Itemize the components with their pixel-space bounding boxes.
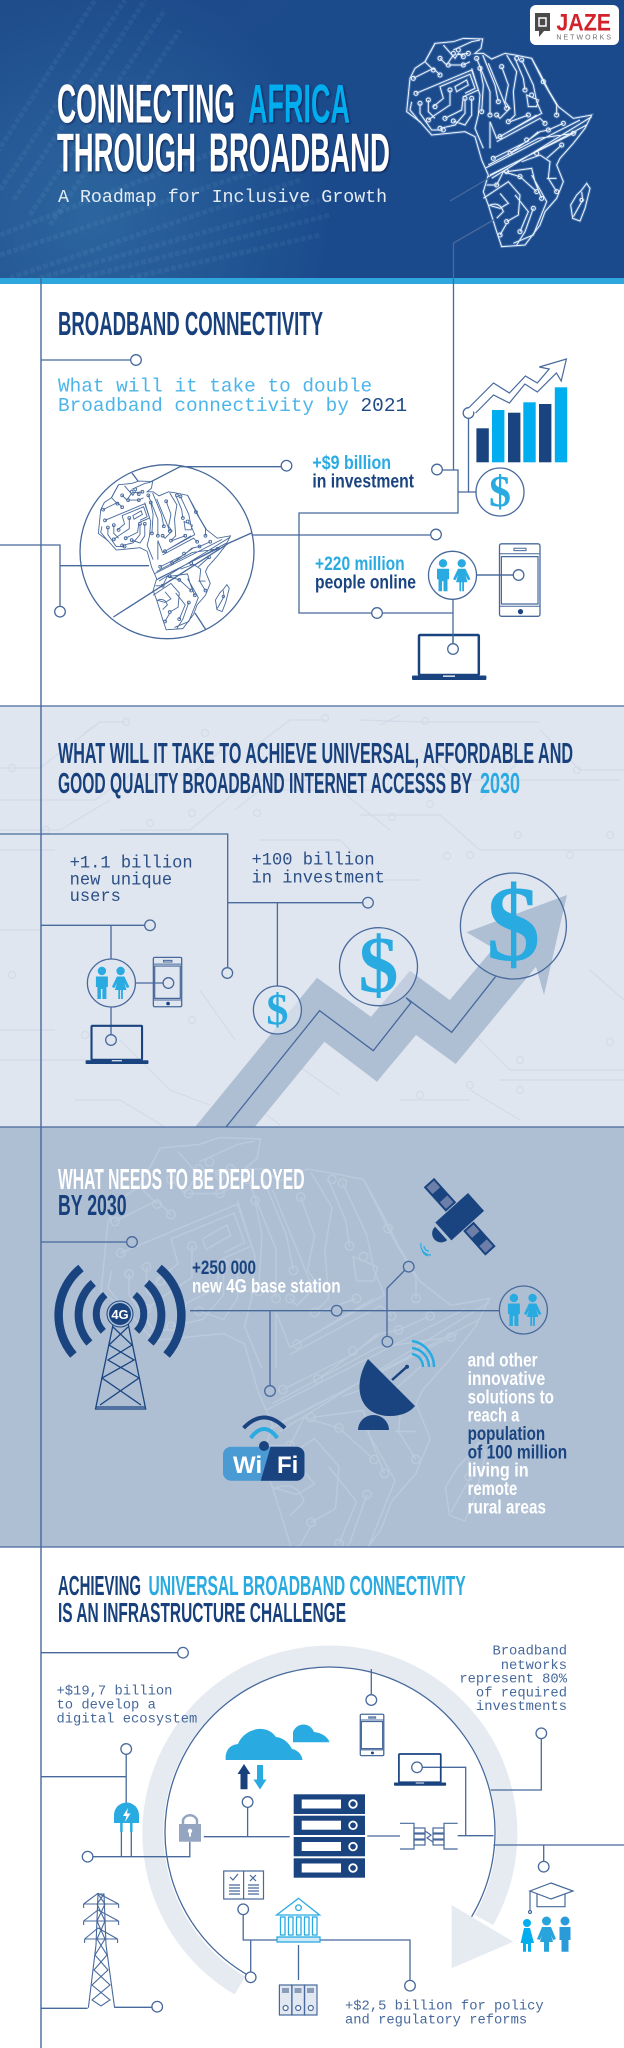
icon: people	[499, 1286, 547, 1334]
solutions text: and other	[468, 1351, 538, 1372]
base station label	[192, 1258, 341, 1298]
digital ecosystem text: to develop a	[56, 1697, 156, 1713]
icon: transfer arrows	[238, 1764, 266, 1790]
title: THROUGH	[57, 122, 196, 184]
icon: phone	[476, 544, 540, 616]
map: circuit Africa	[407, 38, 592, 247]
icon: family	[521, 1916, 570, 1952]
connectors	[41, 1653, 624, 2008]
icon: cloud	[226, 1724, 330, 1760]
icon: large dollar	[460, 865, 566, 984]
icon: laptop	[412, 634, 486, 680]
title: BROADBAND	[209, 122, 390, 184]
solutions text: remote	[468, 1479, 517, 1500]
icon: small dollar: $	[266, 985, 288, 1034]
icon: wifi	[223, 1418, 304, 1481]
icon: dollar: $	[489, 467, 511, 516]
broadband networks text: investments	[476, 1699, 567, 1715]
digital ecosystem text: digital ecosystem	[56, 1711, 197, 1727]
icon: medium dollar: $	[358, 922, 398, 1010]
investment label: +$9 billion	[312, 453, 391, 474]
icon: phone	[360, 1714, 384, 1756]
icon: 4G tower	[59, 1268, 181, 1409]
node circles	[55, 355, 474, 618]
solutions text: reach a	[468, 1406, 520, 1427]
icon: laptop	[394, 1754, 446, 1786]
icon: electricity pylon	[84, 1893, 119, 2008]
broadband networks text: of required	[476, 1686, 567, 1702]
solutions text: solutions to	[468, 1387, 554, 1408]
panel: broadband connectivity	[0, 178, 624, 706]
broadband networks text: represent 80%	[459, 1673, 568, 1688]
title: AFRICA	[248, 73, 350, 135]
node circles	[82, 1647, 549, 2012]
icon: binders	[279, 1985, 317, 2015]
panel: universal access by 2030	[0, 706, 624, 1130]
icon: power plug	[114, 1802, 139, 1832]
icon: laptop	[86, 1026, 148, 1064]
policy text: +$2,5 billion for policy	[345, 1998, 544, 2014]
connectors	[0, 834, 496, 1128]
solutions text: population	[468, 1424, 545, 1445]
heading: ACHIEVING	[58, 1570, 141, 1601]
panel: header banner	[0, 0, 624, 284]
icon: dollar	[476, 467, 524, 516]
inner ring	[165, 1667, 495, 1977]
users label: +1.1 billion	[70, 855, 193, 874]
heading: 2030	[480, 768, 520, 800]
icon: government building	[277, 1898, 320, 1942]
icon: large dollar: $	[486, 865, 540, 984]
ring arrow	[153, 1656, 513, 1986]
node circles	[127, 1237, 414, 1396]
users label: new unique	[70, 871, 172, 890]
icon: satellite	[404, 1168, 507, 1274]
icon: cable connector	[400, 1823, 458, 1849]
growth arrow	[195, 895, 567, 1127]
base station label: +250 000	[192, 1258, 256, 1279]
connectors	[41, 1242, 500, 1386]
heading	[58, 1164, 304, 1222]
users label: users	[70, 888, 121, 907]
panel: what needs to be deployed	[0, 1127, 624, 1575]
globe with Africa	[80, 465, 254, 639]
heading: WHAT NEEDS TO BE DEPLOYED	[58, 1164, 304, 1196]
solutions text: rural areas	[468, 1497, 546, 1518]
icon: people	[428, 551, 476, 599]
heading	[58, 738, 573, 800]
icon: graduation cap	[528, 1883, 573, 1914]
investment label: +100 billion	[252, 851, 375, 870]
section divider lines	[0, 706, 624, 1547]
policy text: and regulatory reforms	[345, 2012, 527, 2028]
solutions text: living in	[468, 1461, 529, 1482]
icon: small dollar	[253, 985, 301, 1034]
icon: medium dollar	[340, 922, 418, 1010]
bar chart with arrow	[468, 359, 567, 462]
logo: Jaze Networks	[530, 5, 619, 45]
panel: infrastructure challenge	[0, 1547, 624, 2048]
question text: What will it take to double	[58, 376, 372, 398]
icon: server rack	[294, 1794, 365, 1878]
broadband networks text: networks	[501, 1658, 567, 1674]
logo: Jaze Networks: NETWORKS	[556, 34, 611, 41]
icon: 4G tower: 4G	[111, 1307, 129, 1322]
heading: BROADBAND CONNECTIVITY	[58, 305, 323, 342]
investment label: in investment	[252, 870, 385, 889]
icon: wifi: Wi	[233, 1452, 262, 1479]
digital ecosystem text: +$19,7 billion	[56, 1683, 172, 1699]
icon: book	[224, 1871, 264, 1899]
icon: wifi: Fi	[277, 1452, 298, 1479]
investment label	[312, 453, 415, 492]
main vertical line	[40, 278, 42, 2048]
heading	[58, 1570, 466, 1628]
solutions text	[468, 1351, 567, 1518]
investment label: in investment	[312, 471, 415, 492]
solutions text: of 100 million	[468, 1442, 567, 1463]
title: CONNECTING	[57, 73, 235, 135]
icon: phone	[153, 957, 182, 1007]
node circles	[145, 897, 373, 978]
heading: BY 2030	[58, 1190, 127, 1222]
solutions text: innovative	[468, 1369, 545, 1390]
broadband networks text: Broadband	[492, 1643, 567, 1659]
title	[57, 73, 390, 184]
people online label: +220 million	[315, 554, 405, 575]
header bottom bar	[0, 278, 624, 284]
heading: IS AN INFRASTRUCTURE CHALLENGE	[58, 1597, 346, 1628]
base station label: new 4G base station	[192, 1277, 341, 1298]
people online label	[315, 554, 416, 593]
connectors	[0, 178, 513, 643]
icon: satellite dish	[358, 1341, 434, 1430]
subtitle: A Roadmap for Inclusive Growth	[58, 188, 387, 208]
people online label: people online	[315, 572, 416, 593]
icon: padlock	[179, 1815, 201, 1842]
icon: people	[87, 959, 135, 1007]
question text: Broadband connectivity by 2021	[58, 395, 407, 417]
logo: Jaze Networks: JAZE	[556, 10, 611, 37]
